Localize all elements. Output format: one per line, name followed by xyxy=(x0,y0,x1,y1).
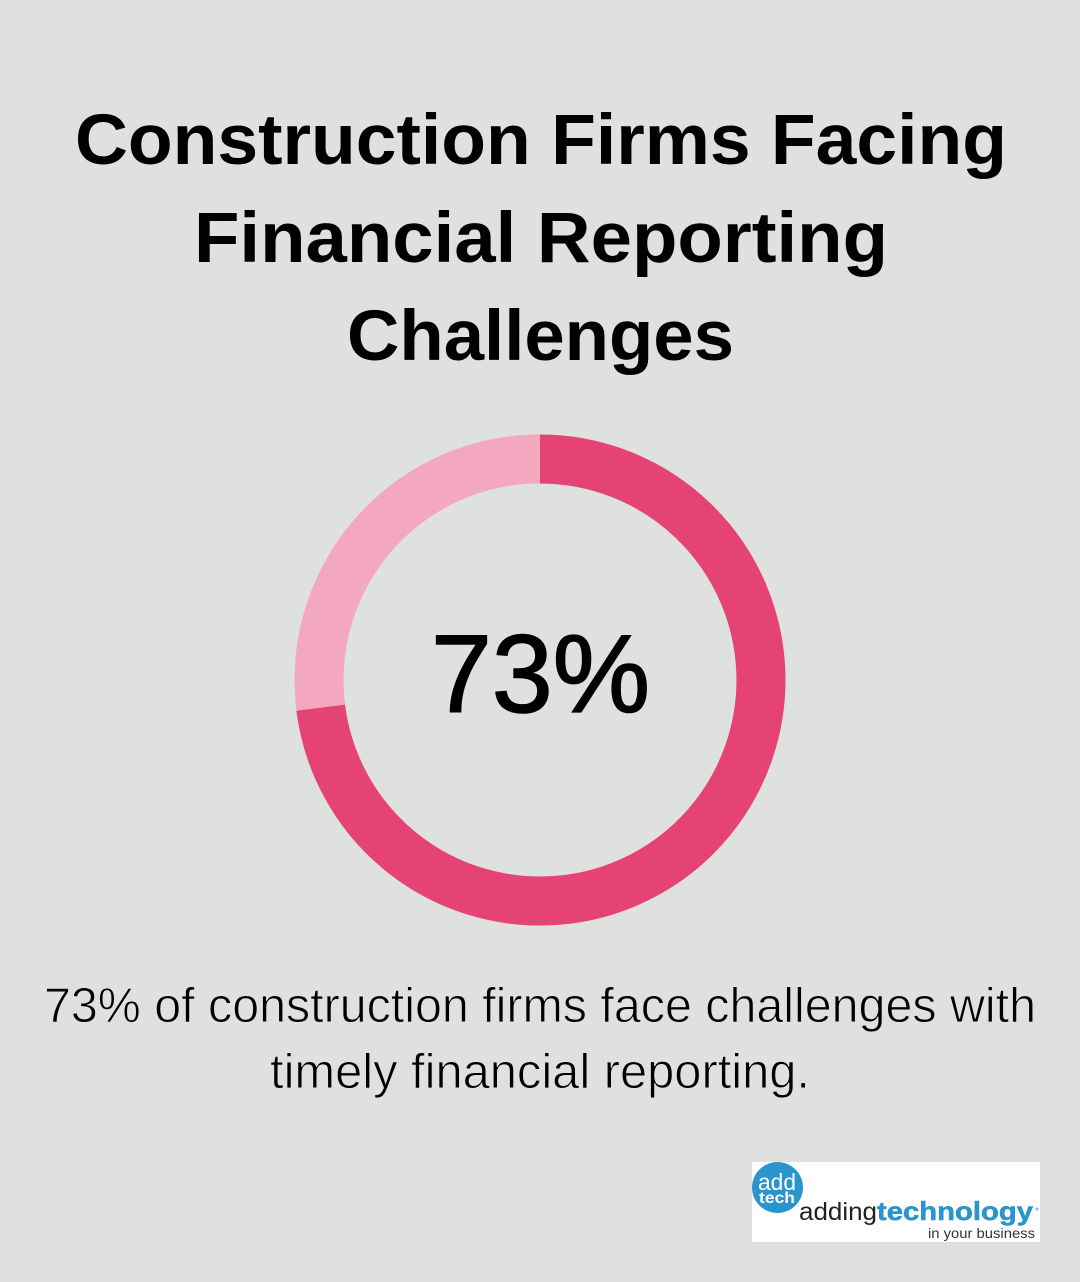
title: Construction Firms Facing xyxy=(75,101,1007,180)
title xyxy=(75,101,1007,376)
title: Challenges xyxy=(347,297,734,376)
donut value: 73% xyxy=(431,613,650,736)
logo tagline: in your business xyxy=(928,1225,1035,1241)
logo wordmark: adding xyxy=(799,1198,877,1226)
donut chart: 73% xyxy=(319,459,761,901)
logo: adding technology xyxy=(752,1162,1040,1242)
icon: add tech badge xyxy=(752,1162,803,1213)
icon: add tech badge: tech xyxy=(759,1190,795,1207)
title: Financial Reporting xyxy=(194,199,888,278)
description: 73% of construction firms face challenges with xyxy=(44,979,1036,1033)
description xyxy=(44,979,1036,1099)
icon: add tech badge: add xyxy=(758,1169,796,1195)
description: timely financial reporting. xyxy=(270,1045,810,1099)
logo: adding technology: technology xyxy=(877,1196,1034,1226)
